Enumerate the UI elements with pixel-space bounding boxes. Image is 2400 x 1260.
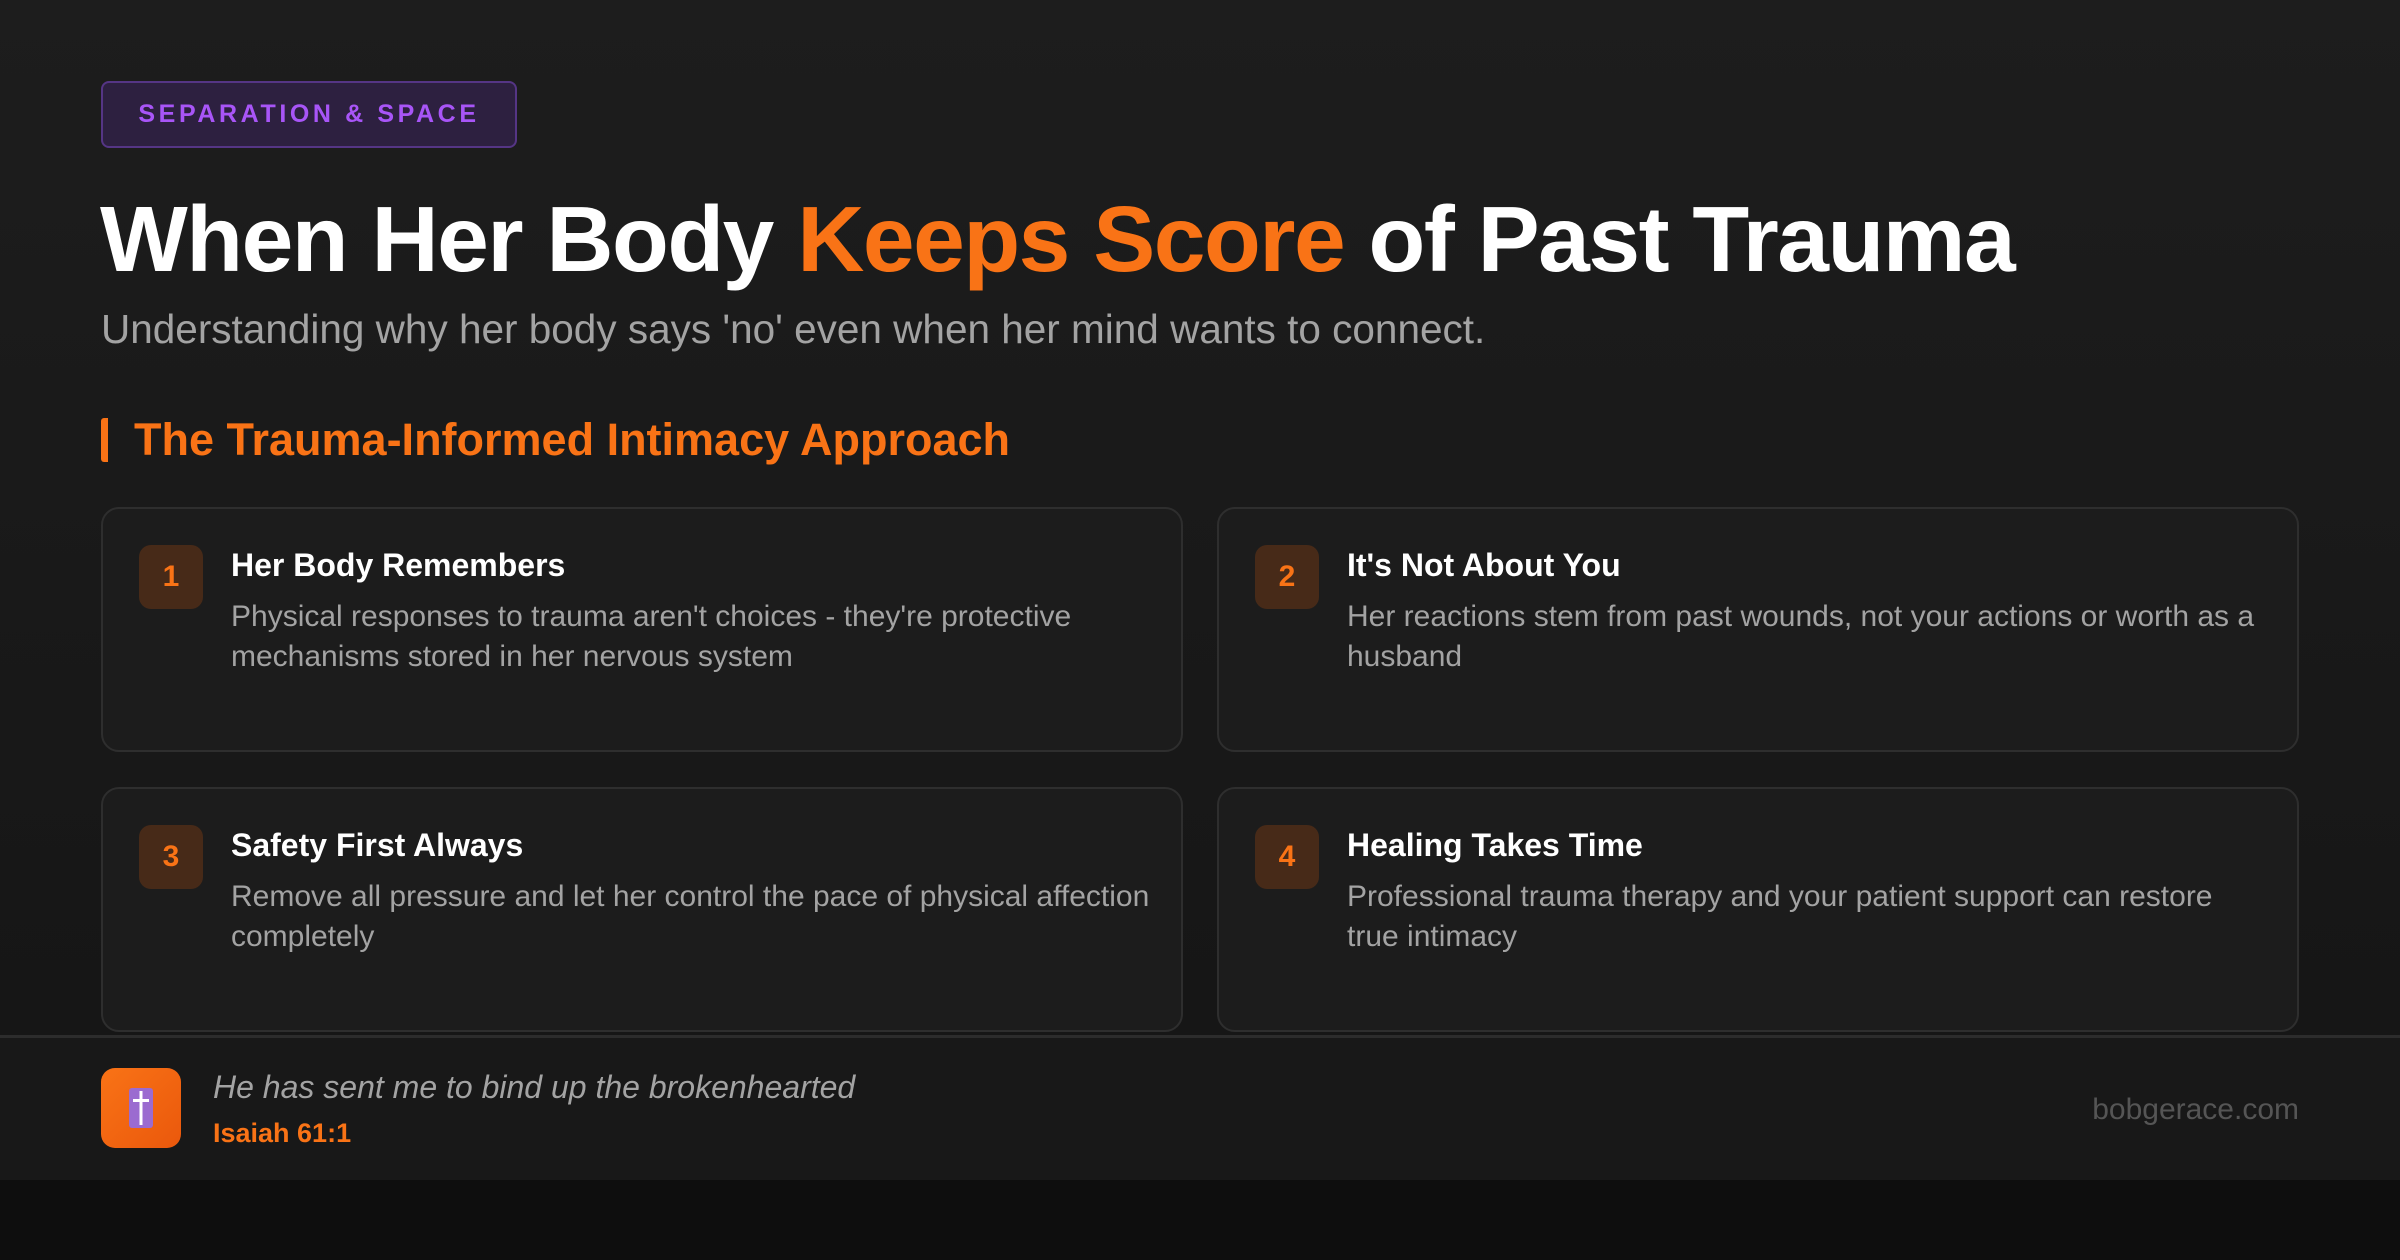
number badge 4: 4 (1279, 840, 1295, 873)
number badge 1 (139, 545, 203, 609)
number badge 3: 3 (163, 840, 179, 873)
icon: cross (101, 1068, 181, 1148)
card 4 (1217, 787, 2299, 1032)
number badge 2 (1255, 545, 1319, 609)
number badge 3 (139, 825, 203, 889)
card 3 (101, 787, 1183, 1032)
card 4 description: Professional trauma therapy and your patient support can restore true intimacy (1347, 880, 2212, 953)
footer bar (0, 1035, 2400, 1180)
card 1 (101, 507, 1183, 752)
scripture quote: He has sent me to bind up the brokenhearted (213, 1069, 855, 1105)
card 1 description: Physical responses to trauma aren't choices - they're protective mechanisms stored in her nervous system (231, 600, 1071, 673)
card 3 title: Safety First Always (231, 827, 523, 863)
category badge (101, 81, 517, 148)
number badge 1: 1 (163, 560, 179, 593)
card 2 (1217, 507, 2299, 752)
category badge: SEPARATION & SPACE (138, 100, 480, 128)
card 2 title: It's Not About You (1347, 547, 1621, 583)
section heading: The Trauma-Informed Intimacy Approach (134, 414, 1010, 465)
subtitle: Understanding why her body says 'no' even when her mind wants to connect. (101, 306, 1485, 352)
card 3 description: Remove all pressure and let her control the pace of physical affection completely (231, 880, 1149, 953)
number badge 2: 2 (1279, 560, 1295, 593)
title: When Her Body Keeps Score of Past Trauma (100, 187, 2014, 291)
card 1 title: Her Body Remembers (231, 547, 565, 583)
number badge 4 (1255, 825, 1319, 889)
card 2 description: Her reactions stem from past wounds, not your actions or worth as a husband (1347, 600, 2254, 673)
card 4 title: Healing Takes Time (1347, 827, 1643, 863)
website: bobgerace.com (2092, 1093, 2299, 1126)
scripture reference: Isaiah 61:1 (213, 1118, 351, 1148)
